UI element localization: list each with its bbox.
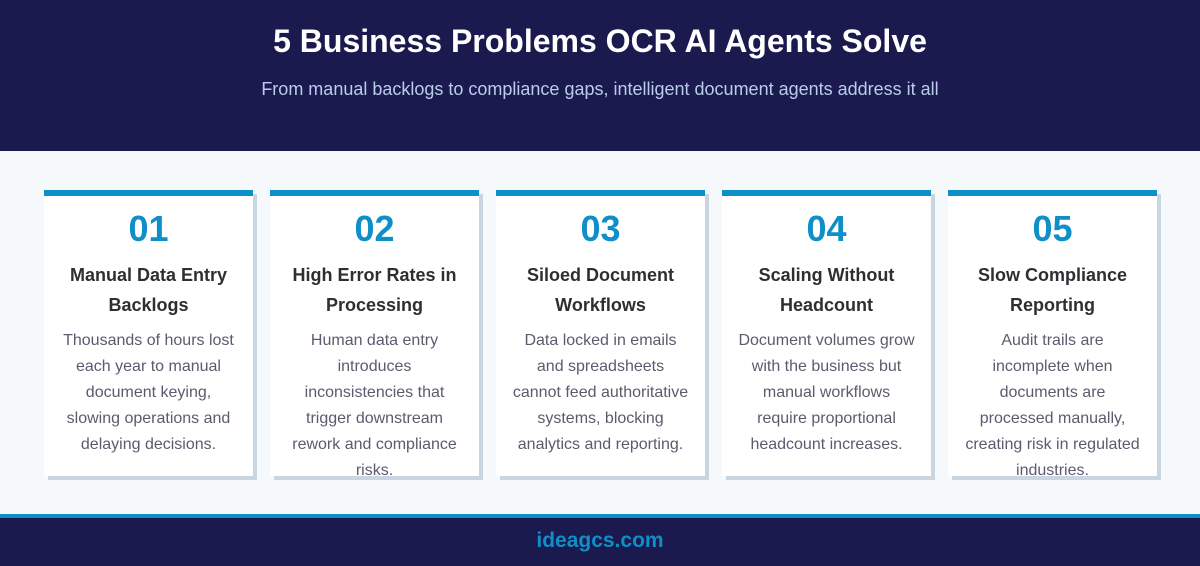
- card 05: [948, 190, 1157, 476]
- subtitle: From manual backlogs to compliance gaps, intelligent document agents address it all: [261, 79, 939, 99]
- card 02: 02: [354, 208, 395, 249]
- card 02: Human data entry introduces inconsistencies that trigger downstream rework and compliance risks.: [292, 332, 457, 476]
- card 04: [722, 190, 931, 476]
- footer: [0, 518, 1200, 566]
- card 05: Audit trails are incomplete when documents are processed manually, creating risk in regulated industries.: [965, 332, 1140, 476]
- card 04: Scaling Without Headcount: [759, 265, 894, 315]
- title: 5 Business Problems OCR AI Agents Solve: [273, 23, 927, 59]
- card 01: 01: [128, 208, 169, 249]
- card 04: 04: [806, 208, 847, 249]
- footer: ideagcs.com: [536, 529, 664, 552]
- card 02: High Error Rates in Processing: [292, 265, 457, 315]
- card 02: [270, 190, 479, 476]
- card 03: Siloed Document Workflows: [527, 265, 674, 315]
- card 01: Thousands of hours lost each year to manual document keying, slowing operations and delaying decisions.: [63, 332, 234, 453]
- card 05: 05: [1032, 208, 1073, 249]
- card 03: Data locked in emails and spreadsheets cannot feed authoritative systems, blocking analytics and reporting.: [513, 332, 688, 453]
- card 03: 03: [580, 208, 621, 249]
- card 04: Document volumes grow with the business but manual workflows require proportional headcount increases.: [738, 332, 915, 453]
- card 01: Manual Data Entry Backlogs: [70, 265, 227, 315]
- card 03: [496, 190, 705, 476]
- card 05: Slow Compliance Reporting: [978, 265, 1127, 315]
- header: [0, 0, 1200, 151]
- card 01: [44, 190, 253, 476]
